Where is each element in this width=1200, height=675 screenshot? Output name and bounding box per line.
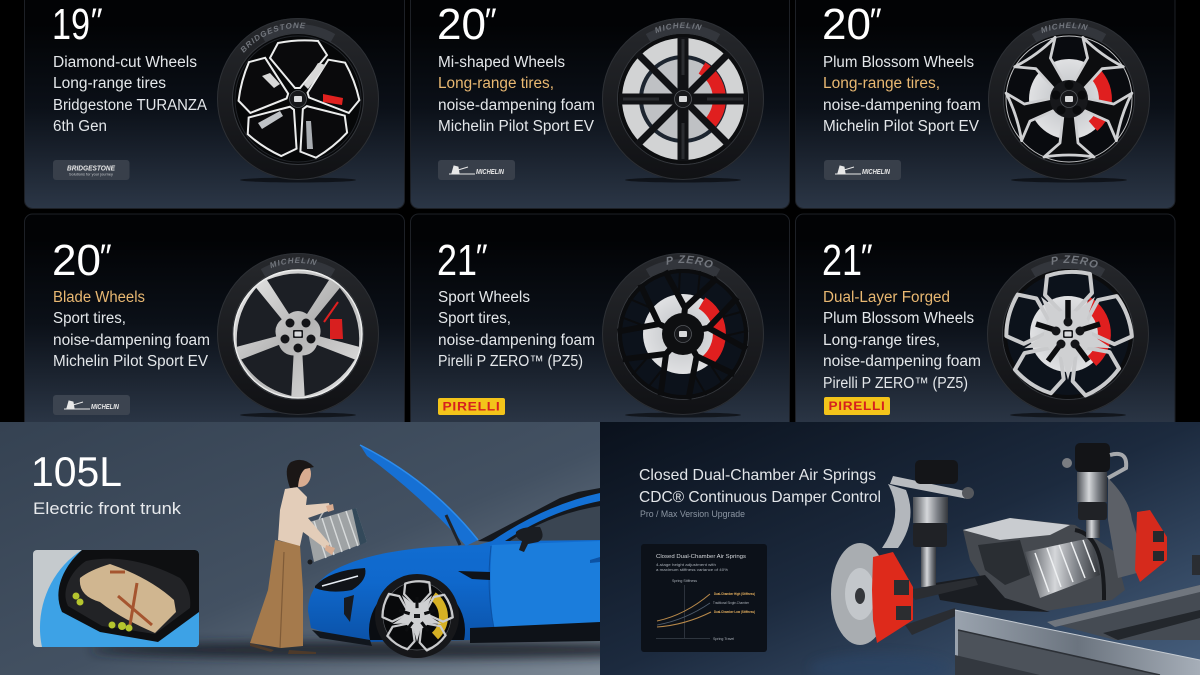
- size mark: ″: [859, 238, 872, 276]
- description: plum blossom: Long-range tires,: [823, 75, 940, 92]
- chart: spring stiffness: Traditional Single-Chamber: [713, 601, 750, 605]
- wheel: plum blossom: [988, 18, 1150, 182]
- card: 20 inch plum blossom wheels: [795, 0, 1176, 209]
- description: plum blossom: [823, 54, 981, 135]
- panel: electric front trunk: [0, 422, 600, 675]
- description: Mi-shaped: Long-range tires,: [438, 75, 554, 92]
- wheel options grid: [24, 0, 1176, 482]
- description: blade: Sport tires,: [53, 310, 126, 327]
- heading: air springs and damper control: Closed Dual-Chamber Air Springs: [639, 467, 876, 484]
- floor reflection: [819, 659, 874, 674]
- description: Mi-shaped: noise-dampening foam: [438, 97, 595, 114]
- side window: [510, 506, 600, 541]
- logo: Michelin: [824, 160, 901, 180]
- subheading: electric front trunk: Electric front trunk: [33, 500, 182, 518]
- note: version upgrade: Pro / Max Version Upgrade: [640, 509, 745, 519]
- wheel: blade: MICHELIN: [270, 258, 317, 268]
- chart: spring stiffness: Spring Travel: [713, 637, 734, 641]
- description: sport: noise-dampening foam: [438, 332, 595, 349]
- size: 20 inch: 20: [437, 0, 486, 49]
- chart: spring stiffness: 4-stage height adjustment with: [656, 563, 716, 567]
- description: 19 inch: Long-range tires: [53, 75, 166, 92]
- description: blade: Blade Wheels: [53, 289, 145, 306]
- logo: Michelin: [53, 395, 130, 415]
- car body: [308, 493, 600, 646]
- chart: spring stiffness: Dual-Chamber Low (Stiffness): [714, 610, 756, 614]
- rear air spring: [1062, 443, 1136, 578]
- front suspension arm: [905, 578, 978, 635]
- front air spring: [882, 460, 974, 587]
- logo: Michelin: [438, 160, 515, 180]
- size: 20 inch: 20: [52, 236, 101, 285]
- wheel: sport: [602, 253, 764, 418]
- description: sport: Sport tires,: [438, 310, 511, 327]
- wheel: diamond-cut: [217, 18, 379, 182]
- description: dual-layer forged: noise-dampening foam: [823, 353, 981, 370]
- description: sport: Pirelli P ZERO™ (PZ5): [438, 353, 583, 370]
- size mark: ″: [868, 2, 881, 40]
- rear brake caliper: [1135, 510, 1167, 582]
- front brake caliper: [872, 552, 913, 643]
- chart: spring stiffness: a maximum stiffness variance of 40%: [656, 568, 729, 572]
- wheel: Mi-shaped: MICHELIN: [655, 22, 702, 34]
- car wheel: [369, 574, 465, 658]
- size: 20 inch: 20: [822, 0, 871, 49]
- description: 19 inch: Diamond-cut Wheels: [53, 54, 197, 71]
- size mark: ″: [483, 2, 496, 40]
- description: 19 inch: [53, 54, 208, 135]
- description: blade: [53, 289, 210, 370]
- hands: [325, 504, 335, 555]
- logo: Michelin: MICHELIN: [862, 169, 891, 176]
- person holding suitcase: [250, 460, 367, 654]
- trousers: [250, 540, 303, 648]
- chart: spring stiffness: Spring Stiffness: [672, 579, 697, 583]
- size mark: ″: [98, 238, 111, 276]
- chart: spring stiffness: Dual-Chamber High (Stiffness): [714, 592, 756, 596]
- windshield and roof: [478, 488, 600, 543]
- logo: Pirelli: [824, 397, 890, 415]
- description: plum blossom: noise-dampening foam: [823, 97, 981, 114]
- head and hair: [298, 468, 311, 487]
- photo: trunk interior: [33, 550, 199, 647]
- logo: Bridgestone: Solutions for your journey: [69, 172, 113, 176]
- mirror: [516, 527, 543, 552]
- wheel: plum blossom: MICHELIN: [1041, 22, 1088, 34]
- description: 19 inch: 6th Gen: [53, 118, 107, 135]
- panel: air suspension: [600, 422, 1200, 675]
- description: dual-layer forged: Dual-Layer Forged: [823, 289, 950, 306]
- wheel: dual-layer forged: [987, 253, 1149, 418]
- card: 20 inch blade wheels: [24, 214, 405, 422]
- description: sport: Sport Wheels: [438, 289, 530, 306]
- logo: Bridgestone: BRIDGESTONE: [67, 166, 115, 172]
- sweater: [278, 487, 331, 549]
- logo: Bridgestone: [53, 160, 130, 180]
- card: 20 inch Mi-shaped wheels: [410, 0, 790, 209]
- door handle: [590, 557, 600, 563]
- card: 21 inch sport wheels: [410, 214, 790, 422]
- logo: Pirelli: PIRELLI: [442, 402, 500, 414]
- wheel: Mi-shaped: [602, 18, 764, 182]
- size mark: ″: [89, 2, 102, 40]
- wheel: dual-layer forged: P ZERO: [1052, 255, 1098, 268]
- side vent: [458, 571, 490, 580]
- description: Mi-shaped: [438, 54, 595, 135]
- description: plum blossom: Michelin Pilot Sport EV: [823, 118, 980, 135]
- chart: spring stiffness: Closed Dual-Chamber Air Springs: [656, 554, 746, 560]
- heading: 105L: 105L: [31, 448, 122, 495]
- wheel: diamond-cut: BRIDGESTONE: [240, 22, 306, 53]
- chart: spring stiffness: [641, 544, 767, 652]
- front intake: [344, 595, 354, 622]
- description: 19 inch: Bridgestone TURANZA: [53, 97, 208, 114]
- logo: Pirelli: PIRELLI: [828, 401, 886, 413]
- floor shadow: [90, 641, 710, 659]
- description: plum blossom: Plum Blossom Wheels: [823, 54, 974, 71]
- description: dual-layer forged: Plum Blossom Wheels: [823, 310, 974, 327]
- description: blade: noise-dampening foam: [53, 332, 210, 349]
- logo: Michelin: MICHELIN: [91, 404, 120, 411]
- size: 21 inch: 21: [437, 236, 477, 285]
- description: dual-layer forged: [823, 289, 981, 392]
- headlight: [315, 568, 365, 592]
- heading: air springs and damper control: [639, 467, 881, 506]
- battery platform: [955, 555, 1200, 675]
- drive unit: [935, 518, 1125, 612]
- description: blade: Michelin Pilot Sport EV: [53, 353, 209, 370]
- description: Mi-shaped: Michelin Pilot Sport EV: [438, 118, 595, 135]
- heading: air springs and damper control: CDC® Continuous Damper Control: [639, 489, 881, 506]
- wheel: blade: [217, 253, 379, 418]
- description: Mi-shaped: Mi-shaped Wheels: [438, 54, 565, 71]
- feet: [250, 643, 316, 654]
- description: dual-layer forged: Pirelli P ZERO™ (PZ5): [823, 375, 968, 392]
- hood open: [360, 445, 478, 546]
- logo: Michelin: MICHELIN: [476, 169, 505, 176]
- front brake disc: [831, 543, 879, 645]
- logo: Pirelli: [438, 398, 505, 415]
- suitcase: [306, 507, 367, 564]
- wheel: sport: P ZERO: [666, 255, 713, 268]
- description: sport: [438, 289, 595, 370]
- card: 21 inch dual-layer forged wheels: [795, 214, 1176, 422]
- size: 21 inch: 21: [822, 236, 862, 285]
- card: 19 inch diamond-cut wheels: [24, 0, 405, 209]
- description: dual-layer forged: Long-range tires,: [823, 332, 940, 349]
- size mark: ″: [474, 238, 487, 276]
- size: 19 inch: 19: [52, 0, 90, 49]
